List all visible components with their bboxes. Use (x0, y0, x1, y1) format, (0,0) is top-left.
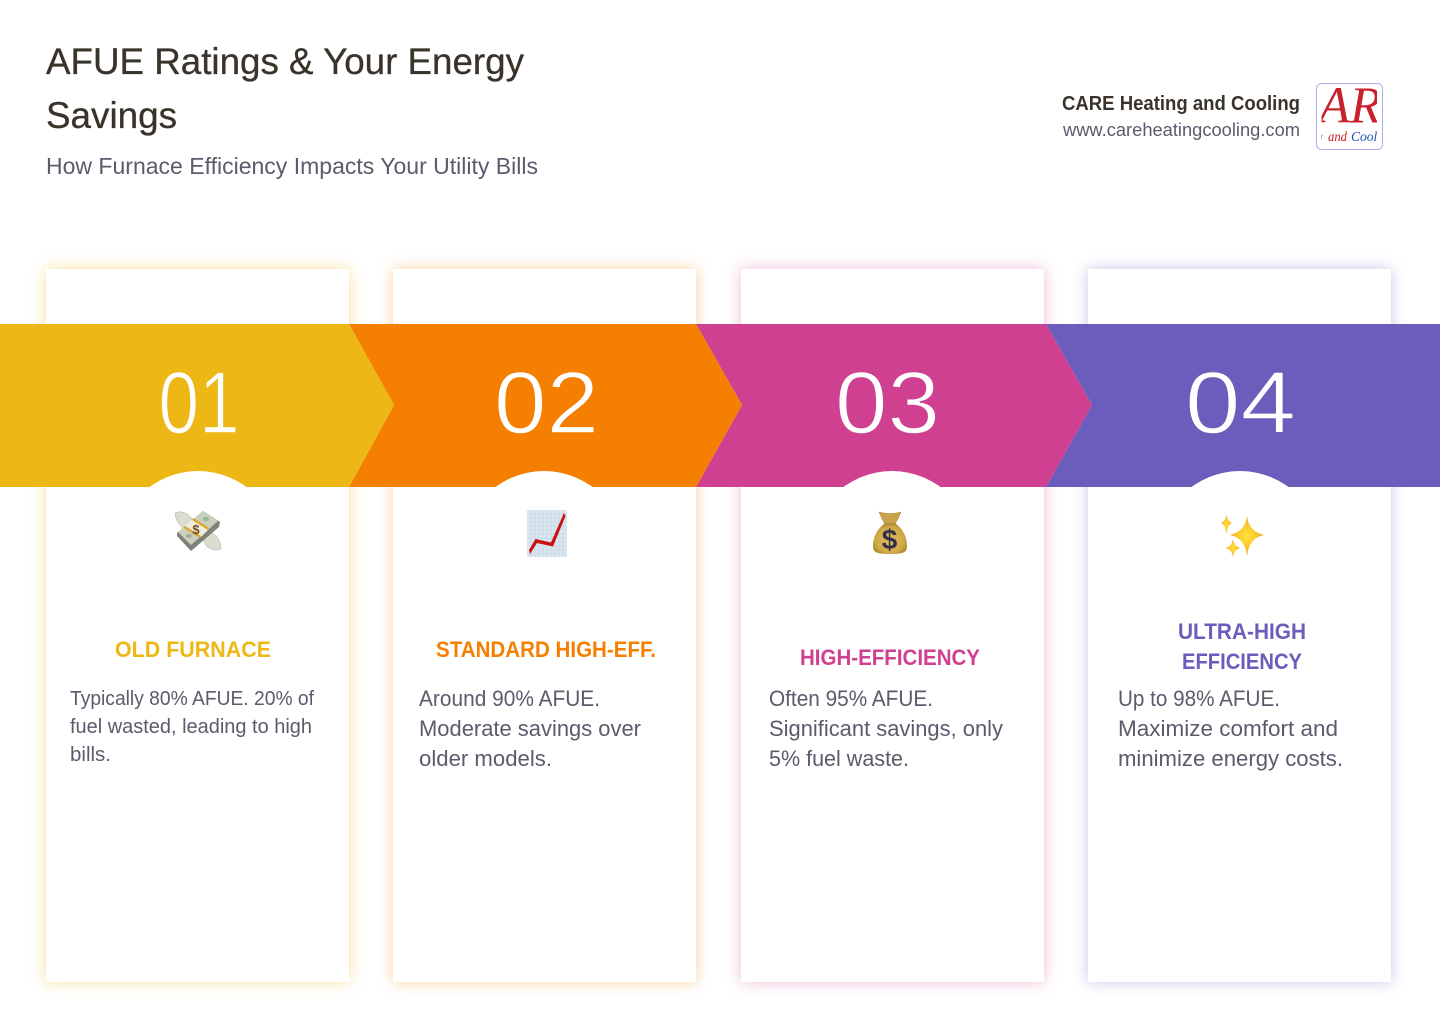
brand name and website (1062, 93, 1300, 140)
logo: and (1328, 129, 1347, 144)
subtitle: How Furnace Efficiency Impacts Your Utility Bills (46, 153, 538, 179)
arrow band (0, 324, 1440, 487)
icon: money with wings: $ (192, 522, 200, 537)
logo: g (1316, 129, 1323, 144)
arrow 4 (1046, 324, 1440, 487)
number 04: 04 (1185, 353, 1296, 452)
infographic drawing (0, 46, 1440, 770)
card 4 text: Up to 98% AFUE. (1118, 686, 1280, 711)
card 2 text: Around 90% AFUE. (419, 686, 600, 711)
card 1 text: bills. (70, 744, 111, 766)
panel: card 3 background (741, 269, 1044, 982)
card 4 text: minimize energy costs. (1118, 746, 1343, 771)
card 4 heading: ULTRA-HIGH (1178, 619, 1306, 644)
card 2 text: older models. (419, 746, 552, 771)
card 2 heading: STANDARD HIGH-EFF. (436, 637, 656, 662)
card 4 text: Maximize comfort and (1118, 716, 1338, 741)
logo: Cooli (1351, 129, 1381, 144)
arrow 3 (696, 324, 1092, 487)
card 3 text: Significant savings, only (769, 716, 1003, 741)
number 02: 02 (494, 353, 599, 452)
arrow 1 (0, 324, 394, 487)
card 3 text: Often 95% AFUE. (769, 686, 933, 711)
card 3 text: 5% fuel waste. (769, 746, 909, 771)
card 3 text (769, 686, 1003, 771)
card 4 heading (1178, 619, 1306, 674)
icon circles (150, 471, 1288, 487)
card 2 text (419, 686, 641, 771)
title: AFUE Ratings & Your Energy (46, 41, 524, 82)
card 3 heading: HIGH-EFFICIENCY (800, 645, 980, 670)
icon: sparkles (1221, 515, 1264, 557)
panel: card 1 background (46, 269, 349, 982)
icon: money bag (873, 512, 907, 555)
arrow 2 (349, 324, 742, 487)
number 03: 03 (835, 353, 940, 452)
icon: chart increasing (527, 510, 567, 557)
panel: card 2 background (393, 269, 696, 982)
icon: money bag: $ (882, 524, 898, 555)
number 01: 01 (158, 353, 240, 452)
card 1 heading: OLD FURNACE (115, 637, 271, 662)
title: Savings (46, 95, 177, 136)
card 1 text: fuel wasted, leading to high (70, 716, 312, 738)
icon: money with wings (175, 511, 221, 551)
card 4 text (1118, 686, 1343, 771)
card 1 text: Typically 80% AFUE. 20% of (70, 688, 314, 710)
brand name and website: CARE Heating and Cooling (1062, 93, 1300, 115)
title (46, 41, 524, 136)
card 4 heading: EFFICIENCY (1182, 649, 1302, 674)
card 1 text (70, 688, 314, 766)
card 2 text: Moderate savings over (419, 716, 641, 741)
brand name and website: www.careheatingcooling.com (1062, 120, 1300, 140)
logo: AR (1316, 78, 1381, 134)
panel: card 4 background (1088, 269, 1391, 982)
